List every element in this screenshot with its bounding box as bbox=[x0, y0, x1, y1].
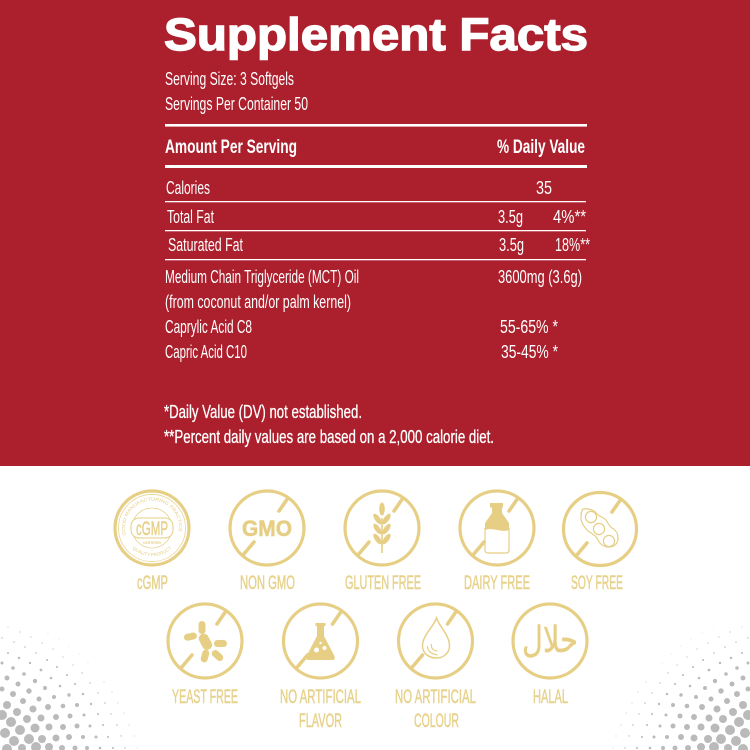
icon: soy pod crossed bbox=[564, 492, 636, 566]
row: saturated fat: Saturated Fat bbox=[168, 235, 243, 255]
row: MCT oil: (from coconut and/or palm kernel) bbox=[165, 292, 351, 312]
row: MCT oil bbox=[165, 267, 582, 312]
badge: gluten free bbox=[345, 491, 421, 594]
label: GLUTEN FREE bbox=[345, 573, 421, 594]
label: NO ARTIFICIAL bbox=[395, 687, 476, 708]
badge: no artificial colour bbox=[395, 604, 476, 732]
badge: non GMO bbox=[230, 491, 304, 594]
label: HALAL bbox=[533, 687, 568, 708]
icon: cGMP seal bbox=[113, 489, 191, 567]
badge: no artificial flavor bbox=[280, 604, 361, 732]
table header: Amount Per Serving bbox=[165, 137, 297, 158]
row: saturated fat: 3.5g bbox=[499, 235, 524, 255]
row: calories: 35 bbox=[536, 178, 552, 198]
label bbox=[280, 687, 361, 732]
icon: cGMP seal: CERTIFIED bbox=[143, 540, 161, 545]
label: COLOUR bbox=[414, 711, 459, 732]
icon: drop crossed bbox=[398, 604, 472, 678]
icon: cGMP seal: QUALITY PRODUCT bbox=[133, 546, 171, 556]
serving information bbox=[165, 69, 308, 114]
row: calories bbox=[166, 178, 552, 198]
label: SOY FREE bbox=[571, 573, 623, 594]
halftone dots: bottom right bbox=[613, 626, 750, 750]
table header bbox=[165, 137, 585, 158]
table header: % Daily Value bbox=[497, 137, 585, 158]
icon: GMO crossed: GMO bbox=[242, 516, 292, 541]
serving information: Serving Size: 3 Softgels bbox=[165, 69, 294, 89]
row: capric acid: Capric Acid C10 bbox=[165, 342, 247, 362]
icon: flask crossed bbox=[284, 604, 358, 678]
row: calories: Calories bbox=[166, 178, 210, 198]
serving information: Servings Per Container 50 bbox=[165, 94, 308, 114]
row: total fat bbox=[167, 207, 586, 227]
title: Supplement Facts bbox=[164, 9, 588, 60]
icon: halal seal: حلال bbox=[522, 619, 578, 661]
row: total fat: 4%** bbox=[553, 207, 586, 227]
row: caprylic acid: Caprylic Acid C8 bbox=[165, 317, 252, 337]
icon: cGMP seal: cGMP bbox=[136, 519, 168, 540]
badge: dairy free bbox=[460, 491, 534, 594]
label: NO ARTIFICIAL bbox=[280, 687, 361, 708]
row: saturated fat bbox=[168, 235, 590, 255]
label: DAIRY FREE bbox=[464, 573, 530, 594]
row: MCT oil: Medium Chain Triglyceride (MCT) Oil bbox=[165, 267, 359, 287]
label: FLAVOR bbox=[299, 711, 342, 732]
badge: soy free bbox=[564, 492, 636, 594]
panel: supplement facts bbox=[0, 0, 750, 466]
badge: yeast free bbox=[168, 604, 242, 708]
footnotes: *Daily Value (DV) not established. bbox=[164, 402, 362, 422]
label: cGMP bbox=[137, 573, 168, 594]
halftone dots: bottom left bbox=[0, 626, 137, 750]
row: total fat: 3.5g bbox=[498, 207, 523, 227]
row: MCT oil: 3600mg (3.6g) bbox=[498, 267, 582, 287]
row: capric acid bbox=[165, 342, 558, 362]
row: saturated fat: 18%** bbox=[555, 235, 590, 255]
icon: cGMP seal: GOOD MANUFACTURING PRACTICE bbox=[122, 498, 182, 536]
badge: halal bbox=[513, 604, 587, 708]
badge: cGMP bbox=[113, 489, 191, 594]
row: capric acid: 35-45% * bbox=[501, 342, 558, 362]
row: caprylic acid bbox=[165, 317, 558, 337]
row: total fat: Total Fat bbox=[167, 207, 214, 227]
label: NON GMO bbox=[240, 573, 295, 594]
footnotes bbox=[164, 402, 494, 447]
icon: wheat crossed bbox=[345, 491, 419, 565]
row: caprylic acid: 55-65% * bbox=[500, 317, 558, 337]
footnotes: **Percent daily values are based on a 2,000 calorie diet. bbox=[164, 427, 494, 447]
icon: yeast cells crossed bbox=[168, 604, 242, 678]
icon: milk bottle crossed bbox=[460, 491, 534, 565]
label bbox=[395, 687, 476, 732]
label: YEAST FREE bbox=[172, 687, 238, 708]
table dividers bbox=[165, 124, 587, 260]
